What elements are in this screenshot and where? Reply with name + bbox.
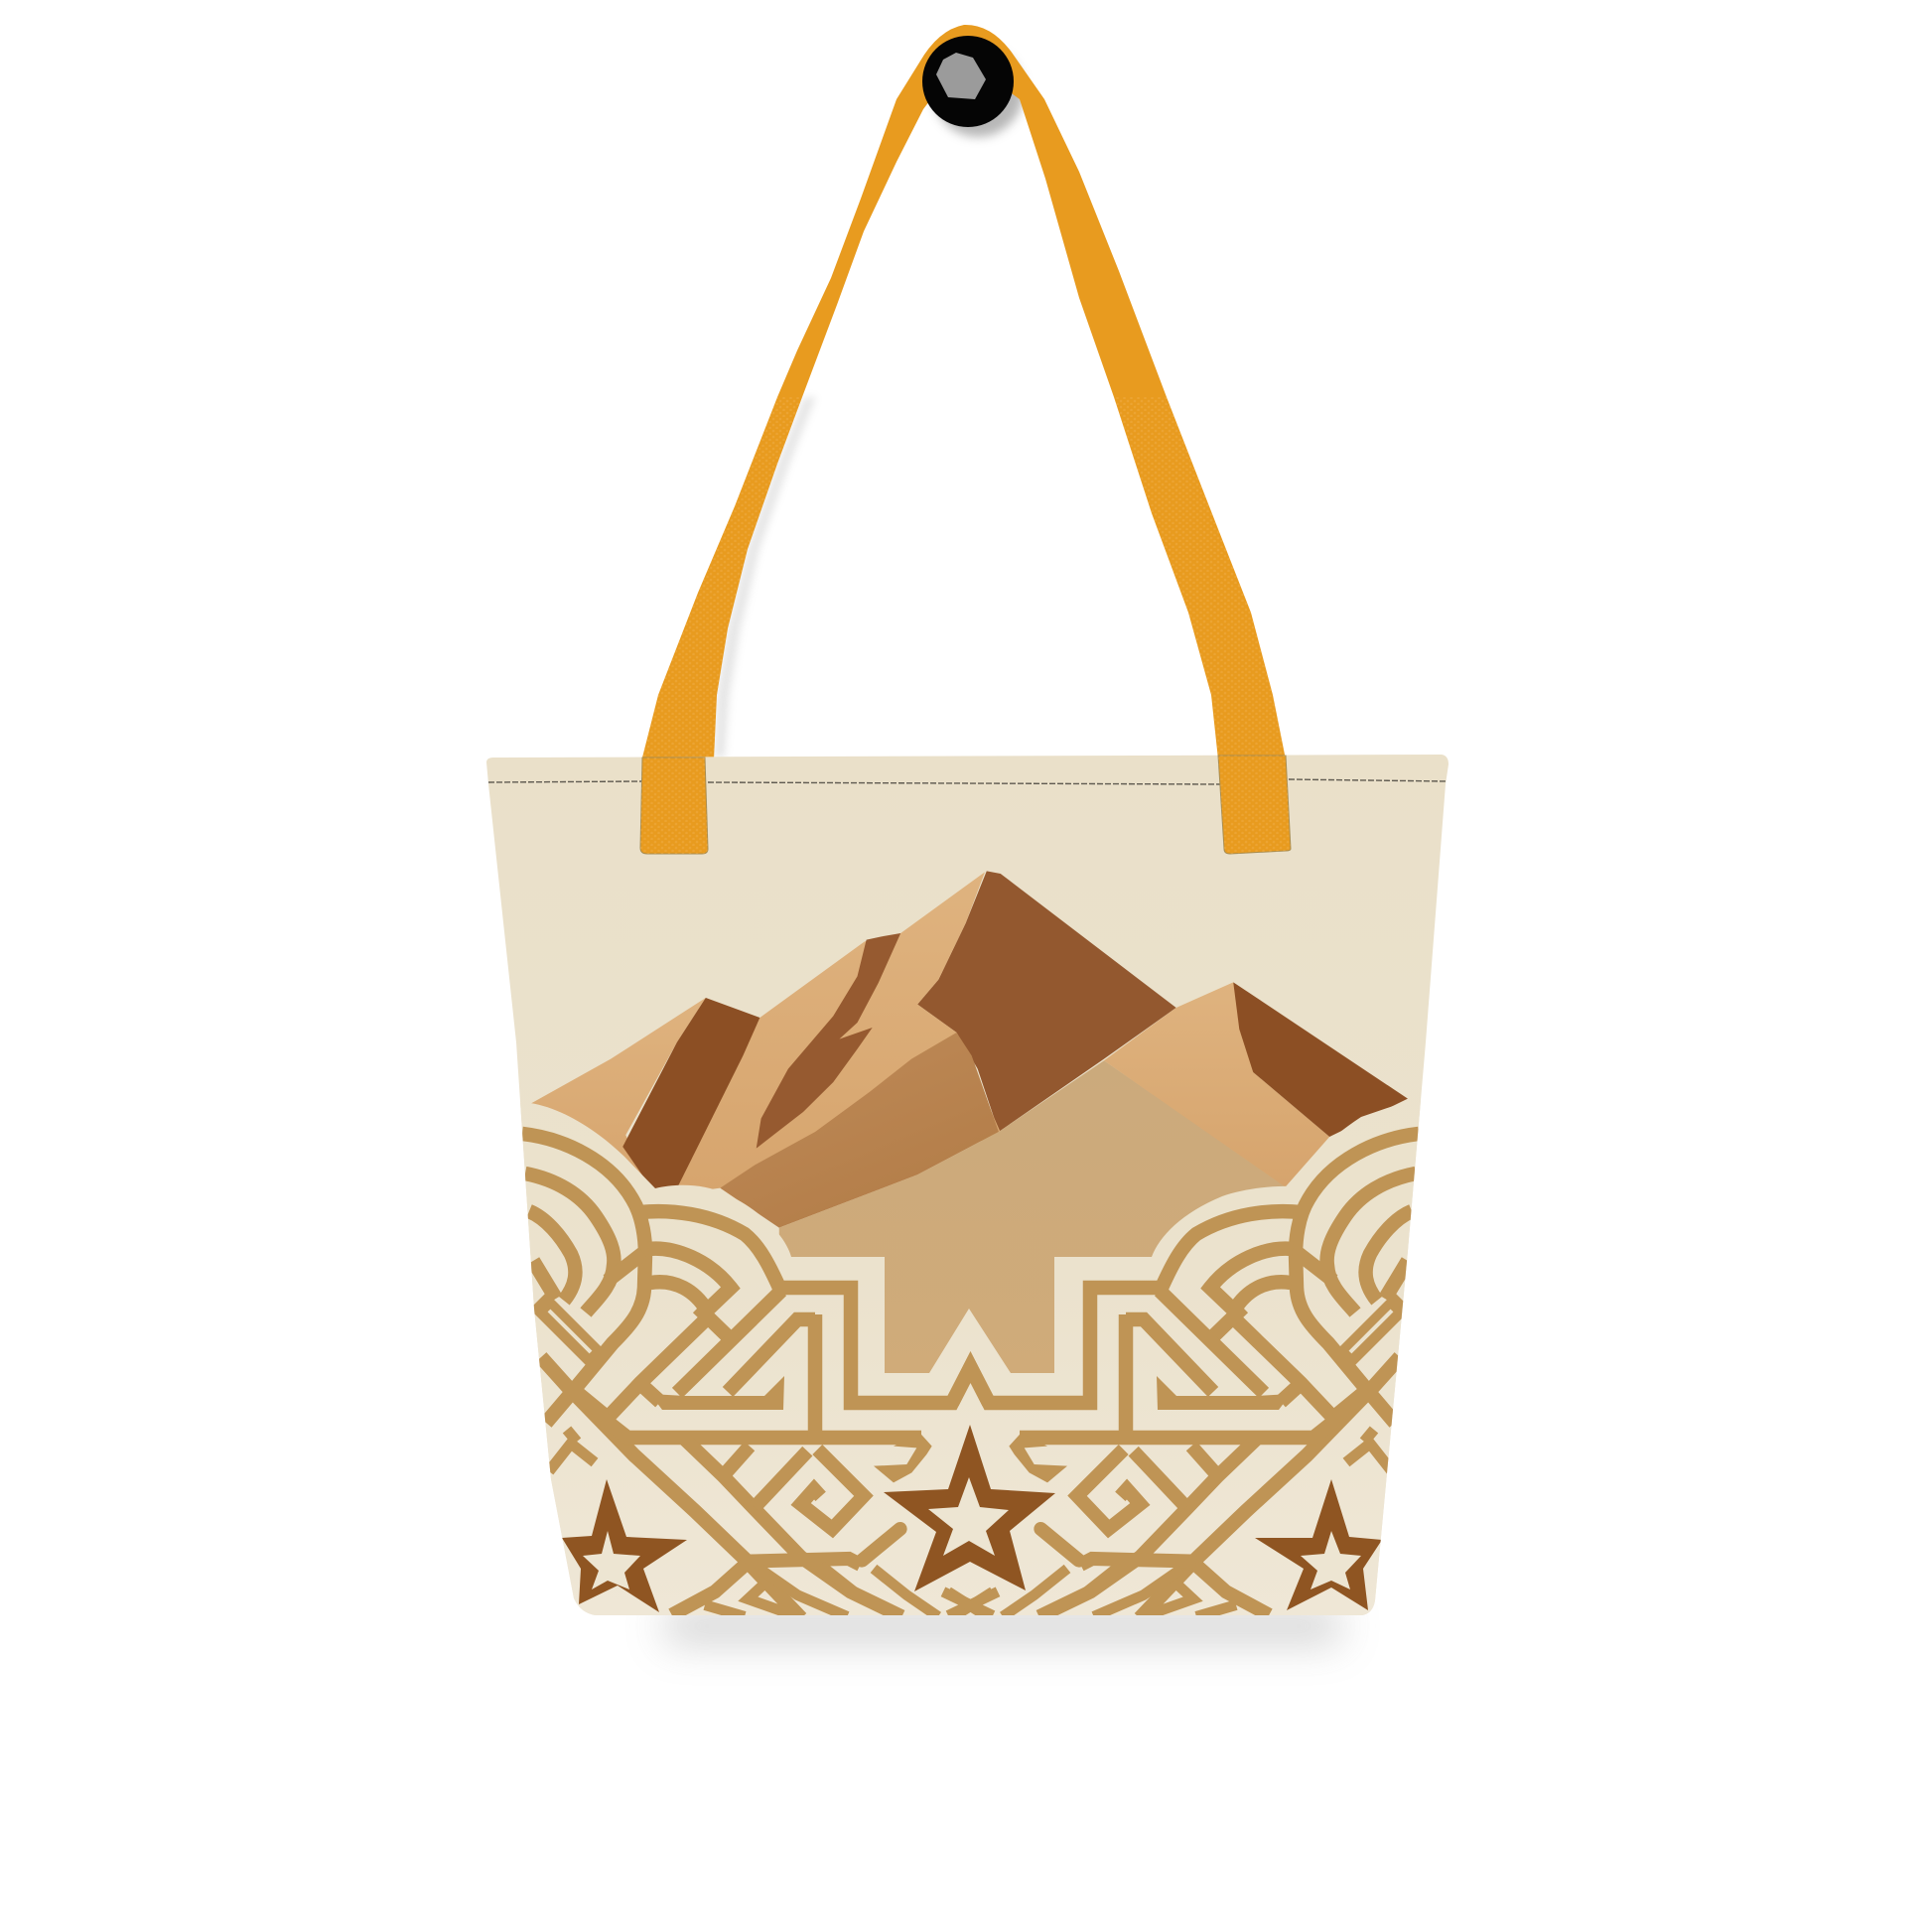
hook (874, 1433, 932, 1482)
gold maze pattern: right half (mirror) (948, 1134, 1419, 1618)
outer step line to notch (640, 1211, 989, 1403)
star: left (562, 1479, 687, 1612)
right peak shaded face (1233, 982, 1408, 1137)
mid-tone slope (720, 1033, 999, 1228)
left small peak shaded strip (622, 998, 759, 1194)
short crossing stroke (698, 1308, 732, 1340)
dark ridge crack (757, 933, 900, 1149)
central vertical (808, 1314, 822, 1438)
shadow under bag (665, 1608, 1340, 1644)
bottom stripes (705, 1566, 993, 1616)
lower left diagonal (672, 1566, 745, 1615)
diagonal one (677, 1291, 781, 1393)
second arc (525, 1173, 614, 1312)
arc connector (608, 1253, 643, 1281)
cream border panel under mountains (520, 1102, 1421, 1615)
thick tick bar (650, 1376, 784, 1410)
left small peak lit face (531, 998, 705, 1175)
V junction and cell edge (574, 1317, 708, 1418)
bag body (477, 750, 1469, 1628)
peg: black pin with grey centre (922, 36, 1014, 127)
left strap patch texture (640, 758, 708, 854)
hem stitching (488, 779, 1448, 784)
sand foreground slope (779, 1060, 1285, 1387)
mountains illustration (531, 871, 1408, 1387)
right strap patch texture (1218, 756, 1291, 854)
triangle cell edge (723, 1447, 750, 1476)
strap shadow (714, 397, 816, 758)
upper horizontal band and hook stem (604, 1419, 921, 1438)
spiral (801, 1449, 864, 1529)
slot highlight (549, 1311, 591, 1352)
line A (683, 1438, 901, 1616)
diagonal two (728, 1319, 815, 1392)
lower maze lines (672, 1433, 993, 1616)
right strap patch (1218, 756, 1291, 854)
inner stroke (533, 1261, 556, 1299)
edge ornament (549, 1430, 595, 1471)
big peak lit face (674, 872, 1002, 1208)
short connector (638, 1382, 660, 1402)
star: centre (884, 1425, 1055, 1591)
diamond cell edge (755, 1451, 807, 1507)
star: right (1255, 1479, 1382, 1610)
left strap patch (640, 758, 708, 854)
third arc (529, 1211, 575, 1301)
big peak shaded face (917, 871, 1176, 1132)
slot band (538, 1301, 596, 1358)
long diagonal (541, 1357, 801, 1618)
rounded stub (862, 1529, 900, 1561)
first inner arc (648, 1249, 731, 1309)
second inner arc (650, 1282, 707, 1311)
lower horizontal (745, 1559, 861, 1565)
strap: yellow handle looped over the peg (642, 25, 1286, 759)
product scene: tote bag hanging on a peg (486, 25, 1449, 1661)
peg shadow (932, 46, 1024, 137)
gold maze pattern: left half (522, 1134, 993, 1618)
outer arc and its diagonal (522, 1134, 645, 1423)
right peak lit face (1104, 982, 1329, 1188)
